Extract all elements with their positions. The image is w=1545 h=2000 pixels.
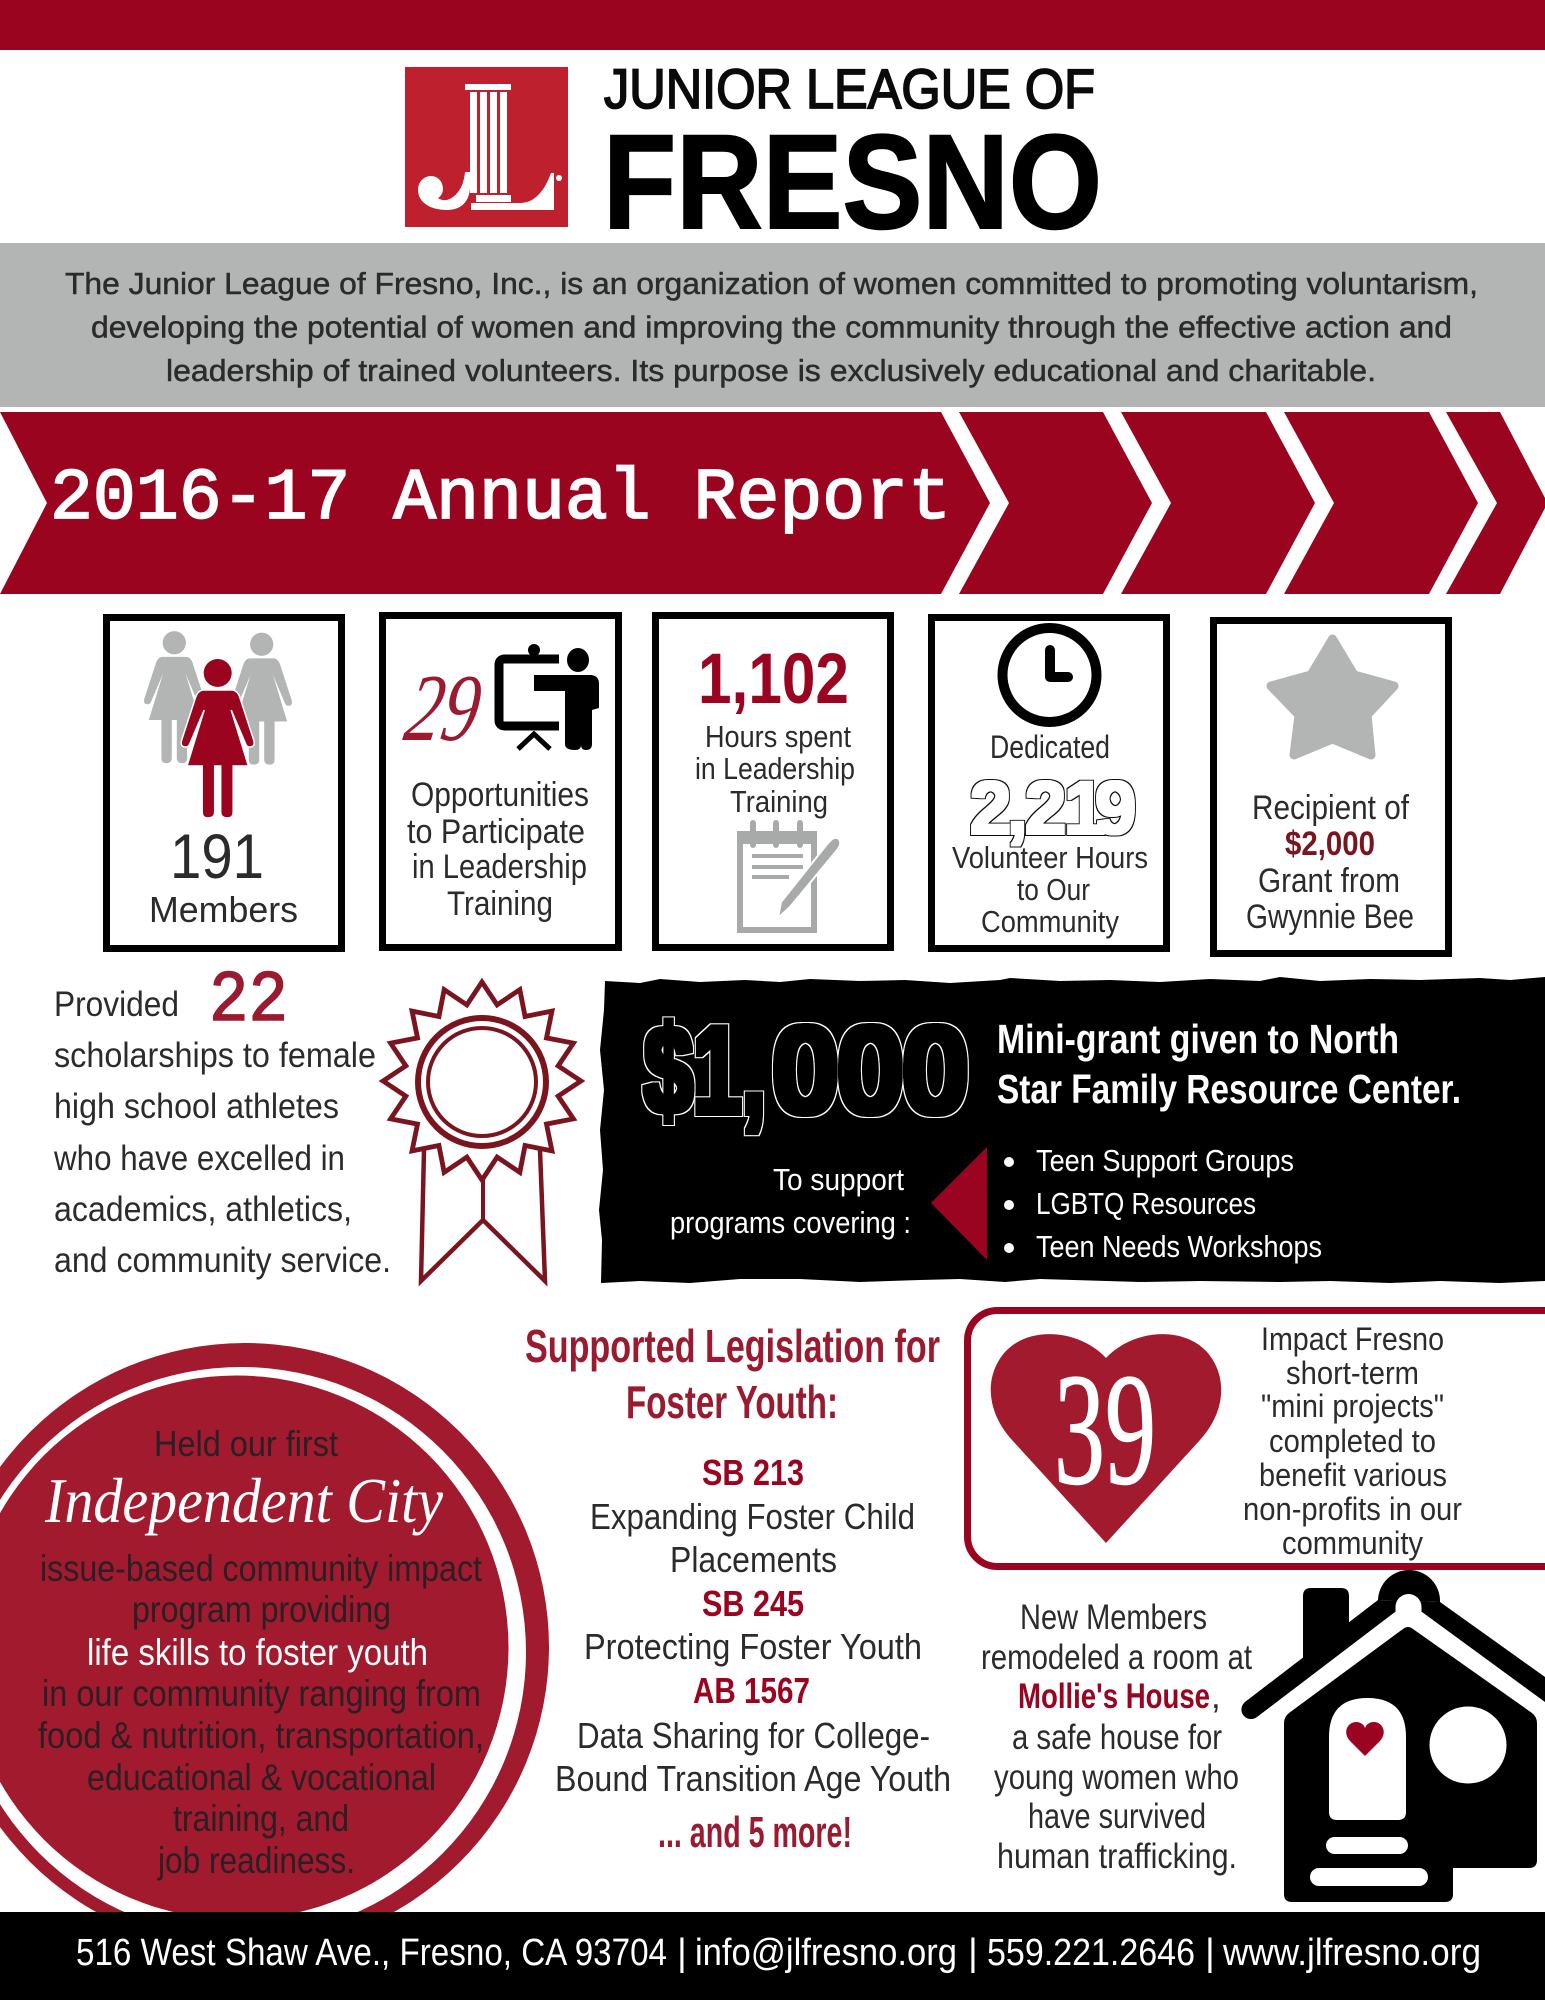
list: bills: SB 245 bbox=[702, 1583, 804, 1624]
panel: leadership opportunities bbox=[382, 616, 618, 948]
list: bills: Bound Transition Age Youth bbox=[555, 1758, 951, 1799]
icon: clock bbox=[1002, 628, 1096, 722]
list: programs bbox=[1004, 1143, 1322, 1264]
text block: Mollie's House: , bbox=[1211, 1677, 1221, 1716]
panel: mission statement: developing the potential of women and improving the community through the effective action and bbox=[91, 310, 1452, 344]
banner: annual report chevrons bbox=[0, 412, 1545, 594]
panel: mission statement bbox=[0, 243, 1545, 407]
icon: heart with 39 bbox=[991, 1334, 1221, 1543]
footer: www.jlfresno.org bbox=[1222, 1932, 1481, 1974]
text: recipient bbox=[1246, 789, 1414, 936]
footer bbox=[0, 1912, 1545, 2000]
list: programs: Teen Needs Workshops bbox=[1036, 1229, 1322, 1264]
icon: star bbox=[1271, 639, 1394, 755]
icon: award ribbon bbox=[383, 982, 581, 1281]
text: recipient: $2,000 bbox=[1285, 825, 1375, 863]
stat: $1,000: 000 bbox=[771, 1002, 970, 1140]
text block: scholarships: and community service. bbox=[54, 1241, 391, 1280]
heading: legislation bbox=[525, 1320, 940, 1428]
text block: Mollie's House: young women who bbox=[994, 1758, 1239, 1797]
text: program description: in our community ranging from bbox=[42, 1673, 481, 1714]
text: mini projects: short-term bbox=[1286, 1355, 1419, 1391]
text: recipient: Gwynnie Bee bbox=[1246, 898, 1414, 936]
banner title: 2016-17 Annual Report bbox=[50, 458, 951, 540]
panel: supported legislation bbox=[525, 1320, 951, 1857]
text block: Mollie's House: New Members bbox=[1020, 1598, 1207, 1637]
text: program description: training, and bbox=[173, 1798, 349, 1839]
text: and 5 more: ... and 5 more! bbox=[658, 1808, 852, 1857]
text block: Mollie's House: human trafficking. bbox=[997, 1837, 1237, 1876]
arrow: triangle bbox=[931, 1147, 987, 1260]
text: mini projects: Impact Fresno bbox=[1261, 1321, 1444, 1357]
footer: 516 West Shaw Ave., Fresno, CA 93704 bbox=[76, 1932, 667, 1974]
footer: | bbox=[1205, 1932, 1215, 1974]
text: program description bbox=[38, 1548, 484, 1881]
text: opportunities: Opportunities bbox=[411, 776, 589, 814]
text block: scholarships: academics, athletics, bbox=[54, 1190, 352, 1229]
panel: mission statement: leadership of trained volunteers. Its purpose is exclusively educational and charitable. bbox=[166, 353, 1376, 388]
stat: $1,000: $1, bbox=[644, 1002, 766, 1140]
text: opportunities bbox=[407, 776, 589, 923]
stat: 29: 29 bbox=[398, 655, 489, 761]
heading: legislation: Foster Youth: bbox=[626, 1376, 838, 1428]
text: opportunities: Training bbox=[447, 885, 553, 923]
text block: Mollie's House: Mollie's House bbox=[1018, 1677, 1210, 1716]
footer: | bbox=[677, 1932, 687, 1974]
list: bills: Expanding Foster Child bbox=[590, 1496, 915, 1537]
list: bills: Protecting Foster Youth bbox=[584, 1626, 922, 1667]
text block: Mollie's House: a safe house for bbox=[1012, 1718, 1222, 1757]
text: to support: To support bbox=[773, 1162, 904, 1197]
panel: Impact Fresno bbox=[968, 1310, 1545, 1566]
icon: Junior League logo bbox=[405, 67, 568, 227]
text block: Mollie's House bbox=[981, 1598, 1252, 1876]
text: recipient: Grant from bbox=[1258, 862, 1400, 900]
panel: mission statement: The Junior League of Fresno, Inc., is an organization of women committed to promoting voluntarism, bbox=[65, 266, 1478, 301]
heading: legislation: Supported Legislation for bbox=[525, 1320, 940, 1372]
text: program description: life skills to foster youth bbox=[87, 1632, 428, 1673]
text: program description: issue-based community impact bbox=[40, 1548, 483, 1589]
heading: Independent City: Independent City bbox=[44, 1465, 444, 1536]
list: programs: LGBTQ Resources bbox=[1036, 1186, 1256, 1221]
text block: Mollie's House: have survived bbox=[1028, 1797, 1206, 1836]
text block: Mollie's House: remodeled a room at bbox=[981, 1638, 1252, 1677]
list: bills: SB 213 bbox=[702, 1452, 804, 1493]
text: opportunities: in Leadership bbox=[412, 848, 587, 886]
icon: house bbox=[1241, 1570, 1545, 1902]
text: mini projects bbox=[1243, 1321, 1462, 1561]
stat: 22: 22 bbox=[209, 960, 288, 1042]
panel: members bbox=[106, 618, 342, 948]
text block: scholarships: high school athletes bbox=[54, 1087, 339, 1126]
stat: 191: 191 bbox=[170, 822, 264, 892]
text: to support bbox=[670, 1162, 911, 1240]
footer: info@jlfresno.org bbox=[695, 1932, 957, 1974]
text: held our first: Held our first bbox=[154, 1423, 338, 1464]
heading: mini-grant: Mini-grant given to North bbox=[997, 1016, 1399, 1062]
list: bills: Data Sharing for College- bbox=[577, 1715, 930, 1756]
text: program description: educational & vocational bbox=[87, 1757, 436, 1798]
icon: heart with 39: 39 bbox=[1054, 1340, 1156, 1518]
text: volunteer hours bbox=[952, 840, 1148, 939]
text: volunteer hours: to Our bbox=[1017, 872, 1090, 907]
footer: 559.221.2646 bbox=[987, 1932, 1195, 1974]
logo heading: Fresno: FRESNO bbox=[603, 108, 1102, 257]
text: program description: job readiness. bbox=[157, 1840, 355, 1881]
text block: scholarships: who have excelled in bbox=[53, 1139, 345, 1178]
text: hours spent: in Leadership bbox=[695, 751, 855, 786]
text: hours spent: Hours spent bbox=[705, 719, 851, 754]
list: bills bbox=[555, 1452, 951, 1799]
text: mini projects: benefit various bbox=[1259, 1457, 1447, 1493]
stat label: members: Members bbox=[149, 889, 298, 930]
text: mini projects: community bbox=[1282, 1525, 1423, 1561]
logo heading: Junior League of: JUNIOR LEAGUE OF bbox=[604, 57, 1095, 120]
text: hours spent bbox=[695, 719, 855, 819]
list: programs: Teen Support Groups bbox=[1036, 1143, 1294, 1178]
text: dedicated: Dedicated bbox=[990, 729, 1110, 765]
panel: Independent City circle bbox=[0, 1343, 549, 1951]
text: mini projects: completed to bbox=[1269, 1423, 1436, 1459]
text: hours spent: Training bbox=[730, 784, 828, 819]
top band bbox=[0, 0, 1545, 50]
heading: mini-grant bbox=[997, 1016, 1461, 1112]
text: opportunities: to Participate bbox=[407, 813, 585, 851]
stat: 1,102: 1,102 bbox=[698, 640, 849, 719]
icon: three women bbox=[144, 631, 292, 818]
stat: 2,219: 2,219 bbox=[970, 766, 1136, 850]
panel: volunteer hours bbox=[932, 618, 1166, 948]
text: program description: program providing bbox=[132, 1589, 391, 1630]
text: mini projects: non-profits in our bbox=[1243, 1491, 1462, 1527]
icon: notepad and pencil bbox=[737, 823, 840, 930]
text: program description: food & nutrition, transportation, bbox=[38, 1715, 484, 1756]
icon: presenter at board bbox=[499, 644, 599, 750]
text: volunteer hours: Volunteer Hours bbox=[952, 840, 1148, 875]
text: recipient: Recipient of bbox=[1252, 789, 1409, 827]
stat: $1,000 bbox=[644, 1002, 970, 1140]
text block: scholarships: Provided bbox=[54, 985, 179, 1024]
text: to support: programs covering : bbox=[670, 1205, 911, 1240]
text block: scholarships: scholarships to female bbox=[54, 1036, 376, 1075]
text block: scholarships bbox=[53, 960, 391, 1280]
panel: leadership training hours bbox=[656, 616, 890, 948]
list: bills: AB 1567 bbox=[693, 1670, 810, 1711]
text: volunteer hours: Community bbox=[981, 904, 1119, 939]
panel: mini-grant bbox=[599, 977, 1545, 1283]
panel: Gwynnie Bee grant bbox=[1214, 620, 1448, 954]
footer: | bbox=[968, 1932, 978, 1974]
text: mini projects: "mini projects" bbox=[1261, 1388, 1444, 1424]
list: bills: Placements bbox=[670, 1539, 837, 1580]
